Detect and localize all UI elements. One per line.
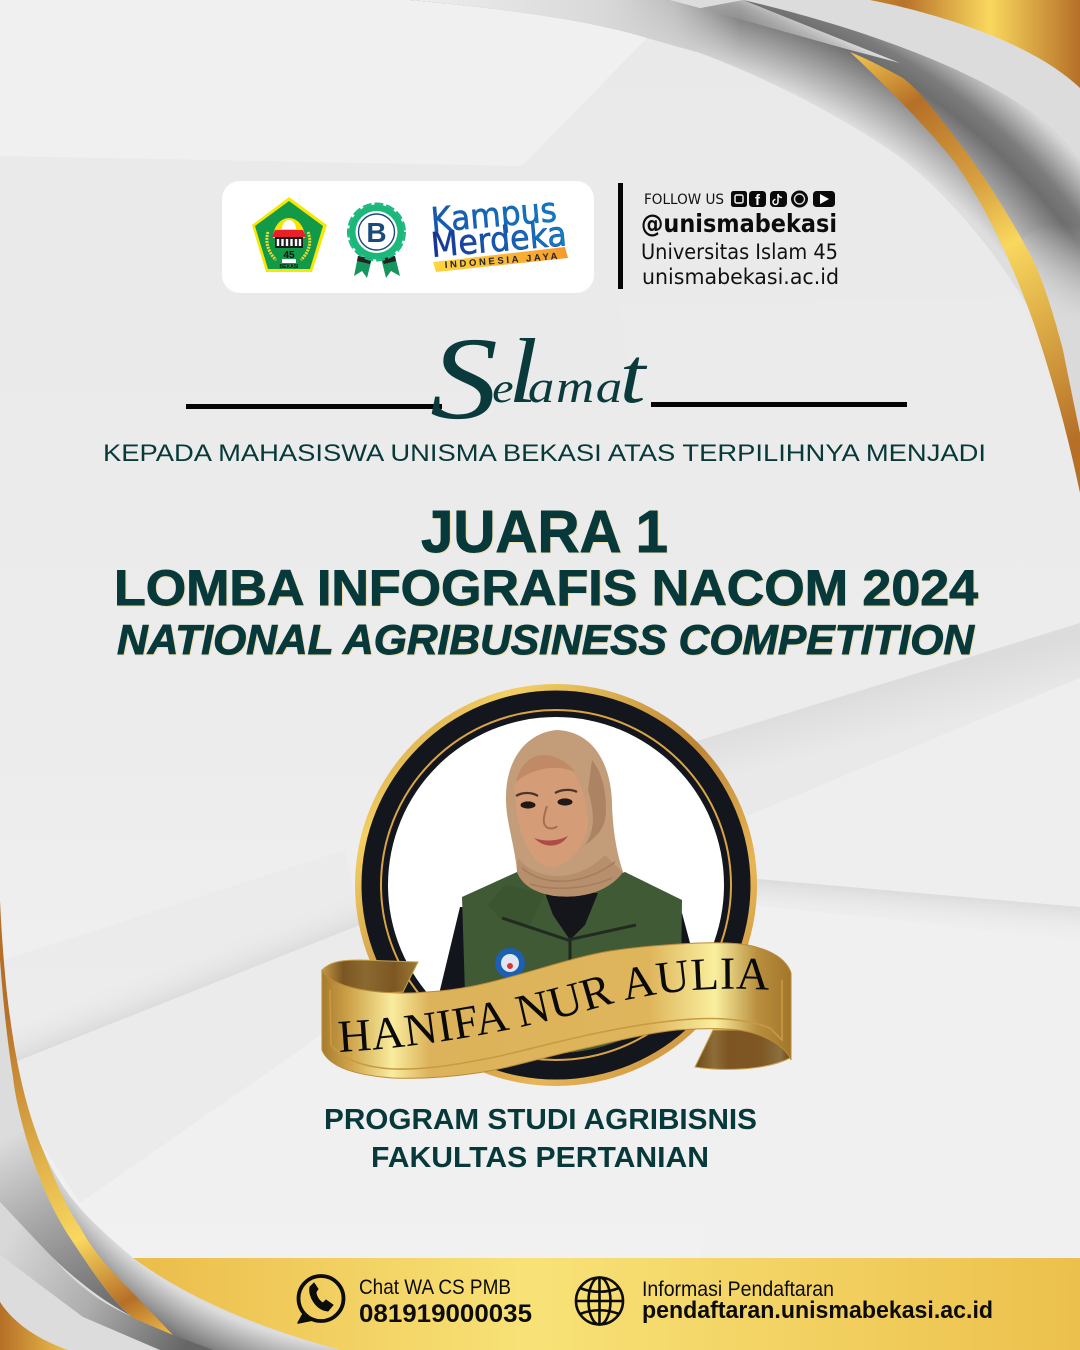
title block <box>114 499 978 663</box>
swoosh: bottom left silver and gold <box>0 900 340 1350</box>
logo: university crest: BEKASI <box>280 264 299 270</box>
registration text <box>642 1278 993 1324</box>
ribbon back folds <box>322 960 790 1069</box>
heading: Selamat with rules: m <box>556 361 594 412</box>
social and contact block: Universitas Islam 45 <box>641 240 838 264</box>
social and contact block: FOLLOW US <box>644 192 724 208</box>
registration text: Informasi Pendaftaran <box>642 1278 834 1301</box>
social and contact block: unismabekasi.ac.id <box>642 265 839 289</box>
globe icon <box>576 1278 623 1324</box>
footer bar <box>130 1258 1080 1350</box>
portrait medallion <box>355 684 757 1086</box>
subtitle: KEPADA MAHASISWA UNISMA BEKASI ATAS TERPILIHNYA MENJADI <box>103 440 986 467</box>
logo panel <box>222 181 594 293</box>
title block: LOMBA INFOGRAFIS NACOM 2024 <box>114 560 978 616</box>
chat whatsapp text: Chat WA CS PMB <box>359 1276 511 1299</box>
name ribbon <box>321 942 792 1079</box>
logo: Kampus Merdeka: INDONESIA JAYA <box>444 251 558 271</box>
heading: Selamat with rules <box>186 313 907 444</box>
heading: Selamat with rules: l <box>508 321 538 422</box>
social and contact block: @unismabekasi <box>641 209 837 238</box>
ribbon band <box>322 943 791 1078</box>
swoosh: top right silver and gold <box>410 0 1080 493</box>
logo: university crest: 45 <box>283 250 295 261</box>
registration text: pendaftaran.unismabekasi.ac.id <box>642 1297 993 1324</box>
chat whatsapp text <box>359 1276 532 1328</box>
social icons <box>731 190 835 209</box>
heading: Selamat with rules: e <box>492 365 514 411</box>
whatsapp icon <box>298 1276 344 1323</box>
heading: Selamat with rules: S <box>430 313 498 444</box>
heading: Selamat with rules: a <box>528 361 554 412</box>
logo: accreditation B badge <box>348 204 405 278</box>
program text <box>324 1104 757 1174</box>
social icons: f <box>755 192 761 209</box>
heading: Selamat with rules: t <box>620 331 648 420</box>
title block: NATIONAL AGRIBUSINESS COMPETITION <box>117 616 976 663</box>
logo: Kampus Merdeka <box>429 190 568 272</box>
heading: Selamat with rules: a <box>596 361 622 412</box>
program text: FAKULTAS PERTANIAN <box>371 1142 709 1174</box>
logo: accreditation B badge: B <box>366 217 387 248</box>
logo: university crest <box>252 197 327 272</box>
logo: Kampus Merdeka: Kampus <box>429 190 558 241</box>
chat whatsapp text: 081919000035 <box>359 1300 532 1328</box>
logo: Kampus Merdeka: Merdeka <box>429 214 568 266</box>
name on ribbon: HANIFA NUR AULIA <box>338 958 769 1052</box>
social and contact block <box>641 190 839 289</box>
portrait illustration <box>440 730 700 1060</box>
title block: JUARA 1 <box>421 499 668 565</box>
program text: PROGRAM STUDI AGRIBISNIS <box>324 1104 757 1136</box>
divider bar <box>618 183 623 289</box>
